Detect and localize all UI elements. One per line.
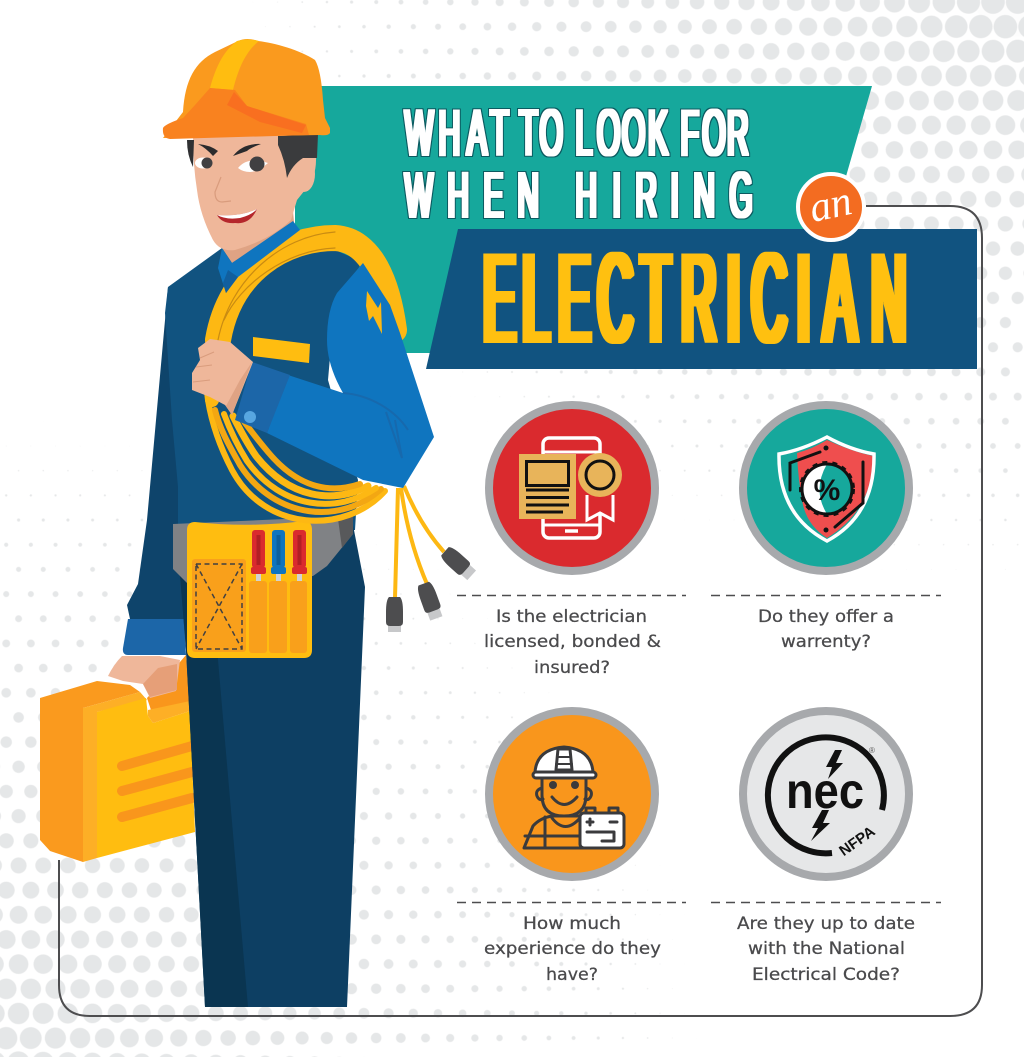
text: code <box>737 914 915 984</box>
text: warranty <box>758 607 894 651</box>
rule <box>711 594 941 596</box>
badge: an <box>798 174 864 240</box>
illustration: electrician <box>40 39 477 1007</box>
icon: nec logo: ® <box>869 746 875 755</box>
tool belt <box>173 516 353 583</box>
rule <box>711 902 941 904</box>
trousers <box>176 525 365 1007</box>
text: experience: How much <box>523 914 621 933</box>
text: code: Are they up to date <box>737 914 915 933</box>
left arm <box>123 287 190 655</box>
heading: what to look for / when hiring: WHAT TO LOOK FOR <box>405 96 749 169</box>
title banner: teal <box>295 86 872 353</box>
text: licensed: insured? <box>534 658 610 677</box>
sleeve <box>235 263 434 488</box>
torso <box>165 235 363 530</box>
icon: warranty shield: % <box>814 474 840 507</box>
heading: what to look for / when hiring <box>405 96 752 231</box>
cable tails and plugs <box>386 486 477 632</box>
text: warranty: warrenty? <box>781 632 871 651</box>
text: licensed <box>484 607 661 677</box>
text: warranty: Do they offer a <box>758 607 894 626</box>
text: experience <box>484 914 661 984</box>
badge: an: an <box>805 178 856 232</box>
chest patch <box>253 337 310 363</box>
helmet <box>163 39 330 139</box>
text: licensed: Is the electrician <box>496 607 647 626</box>
icon: worker with battery <box>489 711 655 877</box>
title banner: navy <box>426 229 977 369</box>
tool pouch <box>187 521 312 658</box>
icon: warranty shield <box>743 405 909 571</box>
icon: nec logo: nec <box>786 763 864 819</box>
upper hand <box>192 339 253 415</box>
icon: nec logo: NFPA <box>836 823 879 860</box>
text: experience: have? <box>546 965 598 984</box>
lower hand <box>108 656 180 698</box>
panel outline <box>59 206 982 1016</box>
head <box>187 134 318 250</box>
toolbox <box>40 655 195 862</box>
text: licensed: licensed, bonded & <box>484 632 661 651</box>
text: experience: experience do they <box>484 939 661 958</box>
heading: electrician: ELECTRICIAN <box>483 228 906 370</box>
shirt collar <box>218 221 300 293</box>
icon: licence on phone <box>489 405 655 571</box>
text: code: with the National <box>748 939 905 958</box>
text: code: Electrical Code? <box>752 965 900 984</box>
rule <box>457 902 686 904</box>
cable coil <box>208 232 394 521</box>
rule <box>457 594 686 596</box>
neck <box>212 200 294 263</box>
heading: what to look for / when hiring: WHEN HIRING <box>405 159 752 231</box>
icon: nec logo <box>743 711 909 877</box>
